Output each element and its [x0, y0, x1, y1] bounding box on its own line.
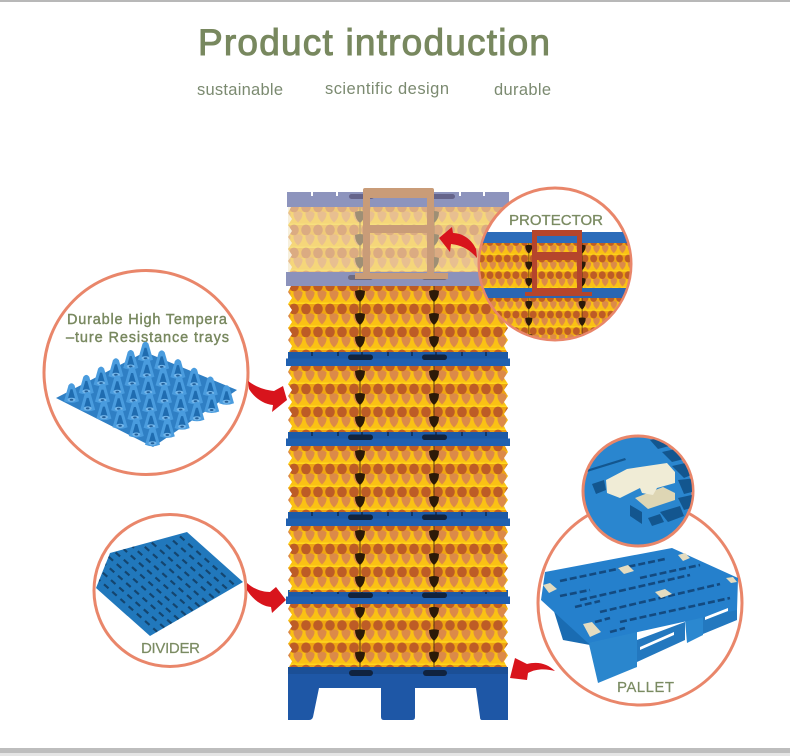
icon: blue divider sheet [96, 532, 243, 636]
protector frame [355, 188, 448, 279]
arrow: divider to stack [247, 583, 286, 613]
detail: cream clip [606, 463, 675, 509]
lavender upper divider [287, 192, 509, 207]
divider band 4 [286, 590, 510, 604]
divider band 3 [286, 512, 510, 526]
pallet label: PALLET [617, 679, 674, 696]
top grey rule [0, 0, 790, 2]
title: Product introduction [198, 22, 550, 63]
protector scene [480, 230, 630, 339]
yellow tray layer 1 [288, 286, 508, 352]
protector label: PROTECTOR [509, 212, 603, 229]
egg tray stack on pallet [286, 188, 510, 720]
icon: blue egg tray [56, 342, 237, 447]
detail: rib grid [588, 439, 692, 526]
subtitle: durable: durable [494, 81, 551, 99]
divider label: DIVIDER [141, 640, 200, 657]
tray label second line: –ture Resistance trays [66, 330, 229, 346]
yellow tray layer 4 [288, 526, 508, 592]
panel: pallet callout [538, 501, 742, 705]
icon: blue pallet [541, 548, 738, 683]
yellow tray layer 2 [288, 366, 508, 432]
tray label: Durable High Tempera [67, 312, 228, 328]
panel: pallet detail callout [583, 436, 700, 546]
arrow: trays to stack [248, 381, 287, 412]
lavender lower divider [286, 272, 510, 286]
panel: divider callout [92, 513, 248, 668]
divider band 2 [286, 432, 510, 446]
divider band 1 [286, 352, 510, 366]
panel: protector callout [477, 188, 635, 346]
panel: trays callout [44, 270, 248, 474]
arrow: protector to stack [439, 227, 477, 258]
pallet base [288, 667, 508, 720]
faded top tray layer [288, 207, 508, 273]
subtitle: sustainable: sustainable [197, 81, 283, 99]
bottom grey rule [0, 748, 790, 756]
bottom yellow tray layer [288, 603, 508, 667]
subtitle: scientific design: scientific design [325, 80, 449, 98]
arrow: pallet to stack [510, 658, 555, 680]
yellow tray layer 3 [288, 446, 508, 512]
